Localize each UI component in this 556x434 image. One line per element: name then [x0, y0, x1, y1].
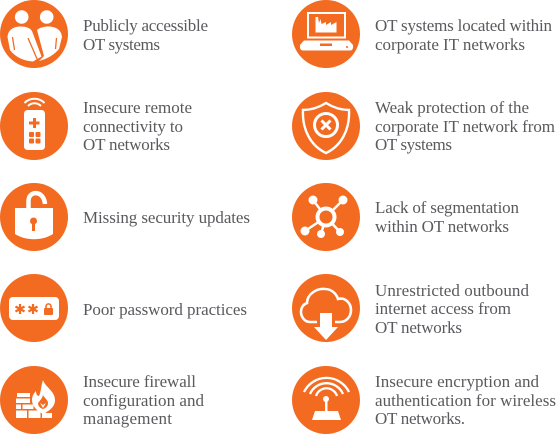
item: missing security updates	[0, 183, 250, 251]
label: within OT networks	[375, 217, 509, 236]
label: internet access from	[375, 299, 511, 318]
item: unrestricted outbound access	[292, 274, 530, 342]
icon: network hub	[292, 183, 360, 251]
item: insecure firewall	[0, 366, 204, 434]
icon: remote control	[0, 92, 68, 160]
icon: wireless router	[292, 366, 360, 434]
icon: two people	[0, 0, 68, 68]
icon: password field	[0, 274, 68, 342]
label: authentication for wireless	[375, 391, 556, 410]
item: OT systems within corporate IT	[292, 0, 552, 68]
item: poor password practices	[0, 274, 247, 342]
label: Insecure remote	[83, 98, 192, 117]
label: Unrestricted outbound	[375, 281, 530, 300]
label: OT networks	[83, 135, 170, 154]
label: management	[83, 409, 172, 428]
icon: shield with cross	[292, 92, 360, 160]
label: OT networks.	[375, 409, 465, 428]
label: Publicly accessible	[83, 16, 208, 35]
item: insecure encryption and authentication	[292, 366, 556, 434]
label: corporate IT networks	[375, 35, 525, 54]
label: Weak protection of the	[375, 98, 529, 117]
label: OT systems	[83, 35, 160, 54]
label: connectivity to	[83, 117, 183, 136]
label: configuration and	[83, 391, 204, 410]
label: Lack of segmentation	[375, 198, 520, 217]
item: weak protection of corporate IT	[292, 92, 555, 160]
item: insecure remote connectivity	[0, 92, 192, 160]
label: OT networks	[375, 318, 462, 337]
label: Insecure firewall	[83, 372, 196, 391]
item: lack of segmentation	[292, 183, 520, 251]
icon: brick wall with flame	[0, 366, 68, 434]
icon: laptop with factory chart	[292, 0, 360, 68]
label: Insecure encryption and	[375, 372, 540, 391]
icon: cloud with download arrow	[292, 274, 360, 342]
label: OT systems located within	[375, 16, 552, 35]
label: OT systems	[375, 135, 452, 154]
icon: open padlock	[0, 183, 68, 251]
label: Poor password practices	[83, 300, 247, 319]
label: corporate IT network from	[375, 117, 555, 136]
label: Missing security updates	[83, 208, 250, 227]
item: publicly accessible OT systems	[0, 0, 208, 68]
